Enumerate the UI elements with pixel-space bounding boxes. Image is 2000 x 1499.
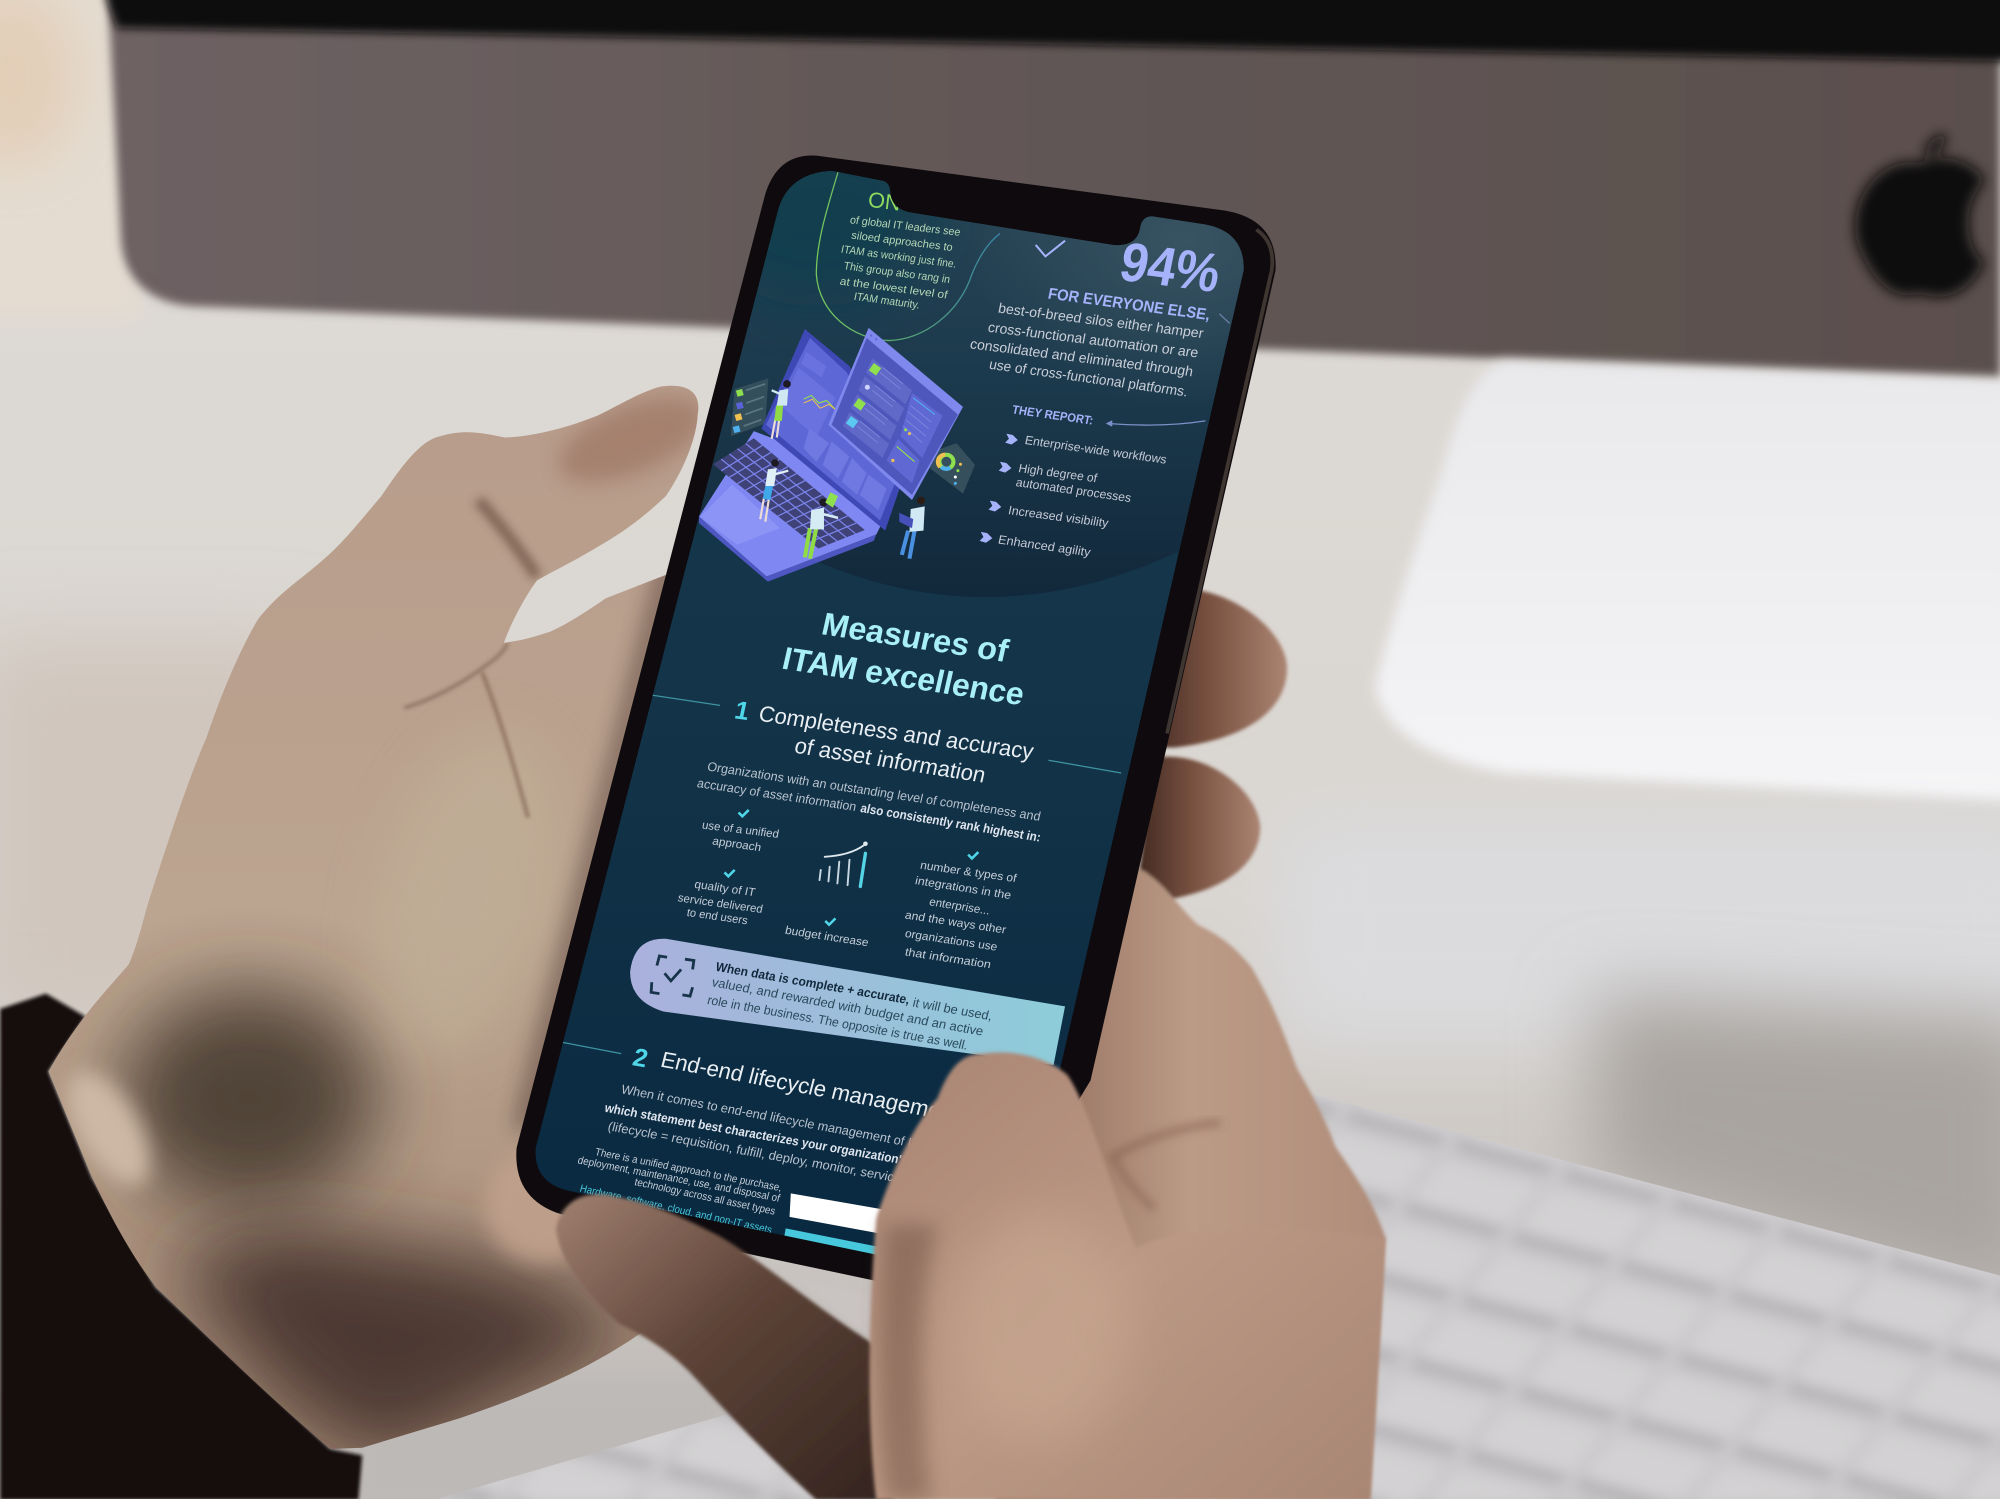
person: woman with blue skirt xyxy=(760,459,788,522)
text: one in ...: ITAM maturity. xyxy=(853,291,921,312)
icon: check mark xyxy=(1036,241,1065,256)
icon: chevron 1 xyxy=(1005,434,1018,445)
divider right 1 xyxy=(1048,760,1121,773)
person: man with green trousers xyxy=(805,492,838,559)
right hand thumb and palm xyxy=(870,1052,1385,1499)
label: they report: THEY REPORT: xyxy=(1011,403,1095,428)
right hand fingers behind phone xyxy=(995,589,1385,1499)
checks and outcome labels: and the ways other xyxy=(904,910,1007,937)
text: one in ...: ITAM as working just fine. xyxy=(840,244,957,271)
callout text: When data is complete + accurate, xyxy=(714,959,911,1007)
section 2 intro text: When it comes to end-end lifecycle management of IT xyxy=(620,1081,921,1151)
floating window xyxy=(828,328,963,500)
checks and outcome labels: to end users xyxy=(686,907,749,927)
checks and outcome labels: number & types of xyxy=(919,860,1018,885)
checks and outcome labels: integrations in the xyxy=(914,875,1012,902)
check 3 xyxy=(825,918,835,925)
section 1 heading: Completeness and accuracy xyxy=(757,701,1037,764)
text block: silos xyxy=(969,300,1205,399)
icon: apple logo xyxy=(1855,134,1985,297)
icon: growth chart xyxy=(820,841,868,886)
list: report items: High degree of xyxy=(1017,461,1099,485)
monitor stand xyxy=(1375,361,2000,801)
callout panel xyxy=(630,939,1065,1065)
sleeve xyxy=(0,994,362,1499)
callout text: it will be used, xyxy=(911,995,994,1023)
survey statement text: technology across all asset types xyxy=(633,1176,777,1218)
light gap below phone xyxy=(797,1278,908,1346)
section 2 intro text xyxy=(602,1081,921,1186)
person: man with tablet xyxy=(899,497,925,559)
section 2 number: 2 xyxy=(630,1044,651,1073)
text: one in ...: at the lowest level of xyxy=(839,276,950,302)
chart lines on screen xyxy=(804,395,835,409)
bar: cyan xyxy=(781,1228,879,1276)
survey statement text: deployment, maintenance, use, and disposal of xyxy=(576,1155,781,1205)
text: one in ...: of global IT leaders see xyxy=(849,214,961,239)
divider left 2 xyxy=(561,1042,621,1054)
icon: chevron 2 xyxy=(999,462,1011,473)
text block: silos: cross-functional automation or are xyxy=(987,319,1200,360)
text: one in ...: ON xyxy=(867,187,902,216)
text: one in ...: This group also rang in xyxy=(843,260,951,286)
callout text: valued, and rewarded with budget and an active xyxy=(710,974,985,1039)
checks and outcome labels: quality of IT xyxy=(693,879,756,899)
list: report items xyxy=(980,433,1168,559)
section 2 intro text: which statement best characterizes your organization's xyxy=(602,1100,910,1168)
callout text xyxy=(706,959,994,1053)
phone screen xyxy=(536,170,1244,1254)
checks and outcome labels: organizations use xyxy=(904,928,998,954)
phone edge highlight xyxy=(1167,230,1272,733)
heading: measures of ITAM excellence: Measures of xyxy=(819,606,1012,669)
callout text: role in the business. The opposite is true as well. xyxy=(706,992,970,1053)
section 1 intro text: accuracy of asset information xyxy=(696,775,858,814)
list: report items: Increased visibility xyxy=(1007,503,1111,530)
checks and outcome labels: budget increase xyxy=(784,925,870,949)
top dome panel xyxy=(697,171,1244,597)
heading: measures of ITAM excellence xyxy=(779,606,1028,712)
bar: white xyxy=(790,1193,969,1250)
decorative tick xyxy=(1219,314,1230,323)
floating list panel xyxy=(731,378,768,436)
list: report items: automated processes xyxy=(1015,475,1133,505)
left hand and wrist xyxy=(0,381,715,1499)
section 1 number: 1 xyxy=(732,697,752,726)
checks and outcome labels: approach xyxy=(711,836,762,854)
green outlined circle xyxy=(816,172,1000,341)
check 1 xyxy=(739,810,749,816)
phone body xyxy=(516,155,1276,1298)
section 2 intro text: (lifecycle = requisition, fulfill, deploy, monitor, service, xyxy=(606,1118,906,1186)
check 4 xyxy=(968,852,978,858)
heading: measures of ITAM excellence: ITAM excellence xyxy=(779,640,1028,712)
donut chart panel xyxy=(930,443,975,494)
survey statement text xyxy=(576,1146,783,1236)
section 1 intro text: Organizations with an outstanding level of completeness and xyxy=(706,759,1042,824)
text: one in ... xyxy=(839,187,961,312)
survey statement text: Hardware, software, cloud, and non-IT assets xyxy=(578,1183,773,1236)
left hand finger over phone xyxy=(556,1194,893,1499)
text: one in ...: siloed approaches to xyxy=(850,230,954,254)
monitor xyxy=(102,0,2000,379)
checks and outcome labels: service delivered xyxy=(677,892,764,916)
icon: scan check xyxy=(651,956,694,996)
section 1 intro text: also consistently rank highest in: xyxy=(859,800,1042,845)
checks and outcome labels xyxy=(677,810,1018,971)
icon: chevron 3 xyxy=(989,501,1001,511)
phone xyxy=(516,156,1276,1280)
text block: silos: use of cross-functional platforms. xyxy=(988,356,1190,399)
text block: silos: best-of-breed silos either hamper xyxy=(997,300,1205,341)
checks and outcome labels: use of a unified xyxy=(701,820,780,841)
check 2 xyxy=(724,870,735,876)
checks and outcome labels: that information xyxy=(904,947,992,971)
survey statement text: There is a unified approach to the purchase, xyxy=(594,1146,783,1194)
laptop base xyxy=(699,431,901,577)
palm and thumb xyxy=(48,386,714,1449)
icon: chevron 4 xyxy=(980,532,992,543)
heading: for everyone else: FOR EVERYONE ELSE, xyxy=(1046,286,1212,324)
illustration: isometric laptop with people xyxy=(699,328,975,582)
palm shading and creases xyxy=(50,381,715,1467)
keyboard xyxy=(383,1071,2000,1499)
section 2 heading: End-end lifecycle management xyxy=(658,1047,962,1127)
section 1 heading: of asset information xyxy=(792,733,988,788)
divider left 1 xyxy=(652,695,720,705)
text block: silos: consolidated and eliminated through xyxy=(969,335,1195,379)
laptop keyboard xyxy=(713,438,865,548)
laptop screen xyxy=(761,329,901,531)
arrow xyxy=(1107,421,1205,426)
person: woman with green skirt xyxy=(772,380,791,439)
list: report items: Enhanced agility xyxy=(997,533,1093,559)
stat: 94%: 94% xyxy=(1115,230,1226,304)
checks and outcome labels: enterprise... xyxy=(928,896,991,918)
list: report items: Enterprise-wide workflows xyxy=(1024,433,1168,467)
